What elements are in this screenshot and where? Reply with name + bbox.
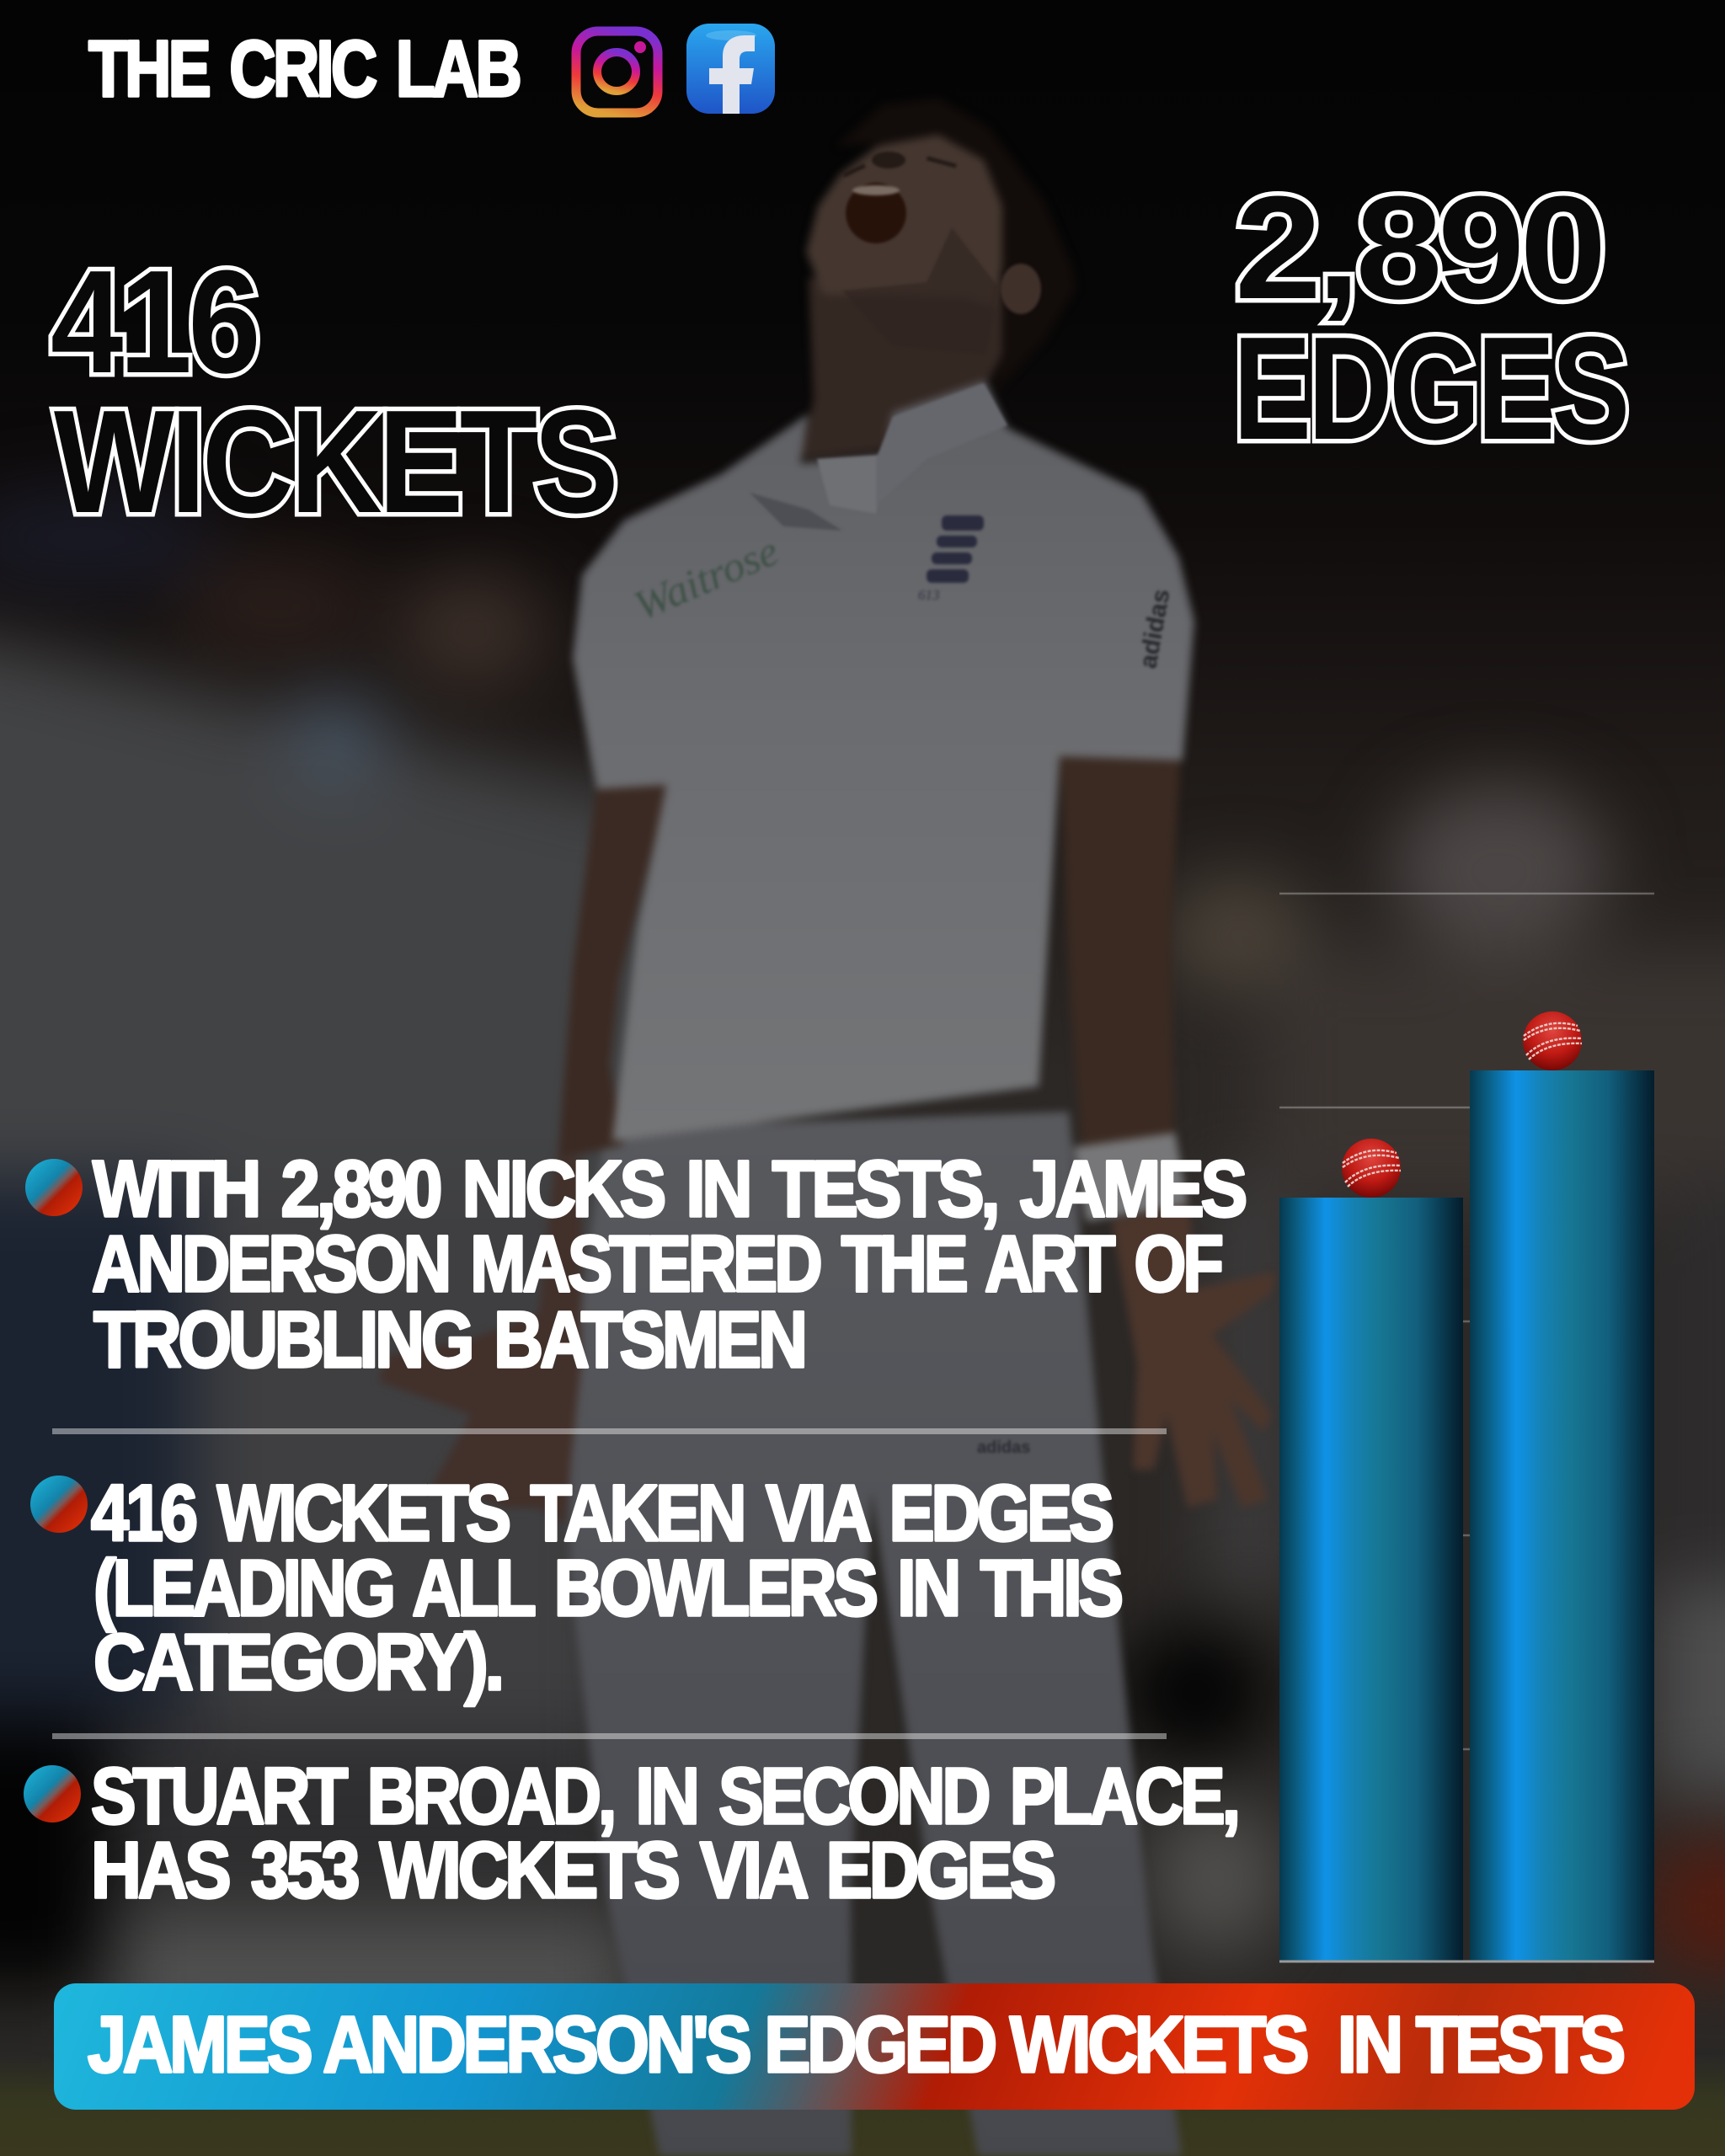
- icon: cricket ball on edges bar: [1523, 1011, 1582, 1070]
- divider 2: [52, 1733, 1167, 1739]
- title banner: [54, 1983, 1695, 2110]
- bullet point 2: 416 WICKETS TAKEN VIA EDGES: [91, 1469, 1112, 1558]
- bullet point 1: WITH 2,890 NICKS IN TESTS, JAMES: [93, 1145, 1245, 1234]
- bullet point 2: (LEADING ALL BOWLERS IN THIS: [93, 1544, 1121, 1633]
- stat: 416 wickets: 416: [51, 239, 257, 403]
- arm left of frame: [558, 783, 670, 1158]
- shirt: [573, 381, 1194, 1141]
- icon: instagram: [576, 31, 658, 113]
- icon: cricket ball on wickets bar: [1342, 1139, 1401, 1198]
- bullet point 2: CATEGORY).: [93, 1618, 501, 1707]
- hand left: [379, 1158, 581, 1524]
- stat: 416 wickets: WICKETS: [54, 379, 615, 543]
- wristband: [1074, 1133, 1188, 1221]
- icon: facebook: [686, 24, 775, 114]
- stat: 416 wickets: [51, 239, 615, 543]
- bullet point 1: [25, 1145, 1245, 1385]
- shirt details: [627, 152, 1175, 1457]
- shirt details: Waitrose: [627, 526, 785, 629]
- bar: wickets: [1279, 1198, 1463, 1961]
- bullet point 3: HAS 353 WICKETS VIA EDGES: [91, 1826, 1054, 1915]
- neck: [799, 278, 1002, 460]
- stat: 2,890 edges: EDGES: [1233, 306, 1626, 470]
- hand right: [1112, 1204, 1276, 1508]
- bar chart: wickets vs edges: [1279, 894, 1654, 1961]
- bar: edges: [1470, 1070, 1654, 1961]
- bullet point 3: STUART BROAD, IN SECOND PLACE,: [91, 1752, 1237, 1841]
- stat: 2,890 edges: 2,890: [1235, 165, 1602, 329]
- arm right of frame: [1060, 750, 1181, 1154]
- brand name: THE CRIC LAB: [88, 24, 520, 114]
- bullet point 3: [24, 1752, 1237, 1915]
- trousers: [570, 1112, 1182, 2156]
- player: bowler celebrating, head tilted back: [379, 98, 1276, 2156]
- bullet point 1: TROUBLING BATSMEN: [93, 1295, 804, 1385]
- divider 1: [52, 1428, 1167, 1434]
- stat: 2,890 edges: [1233, 165, 1626, 470]
- bullet point 2: [30, 1469, 1121, 1707]
- face: [806, 135, 1002, 307]
- shirt details: adidas: [977, 1438, 1030, 1457]
- shirt details: 613: [918, 587, 940, 603]
- shirt details: adidas: [1134, 587, 1175, 670]
- hair back: [836, 98, 1076, 395]
- bullet point 1: ANDERSON MASTERED THE ART OF: [92, 1219, 1221, 1309]
